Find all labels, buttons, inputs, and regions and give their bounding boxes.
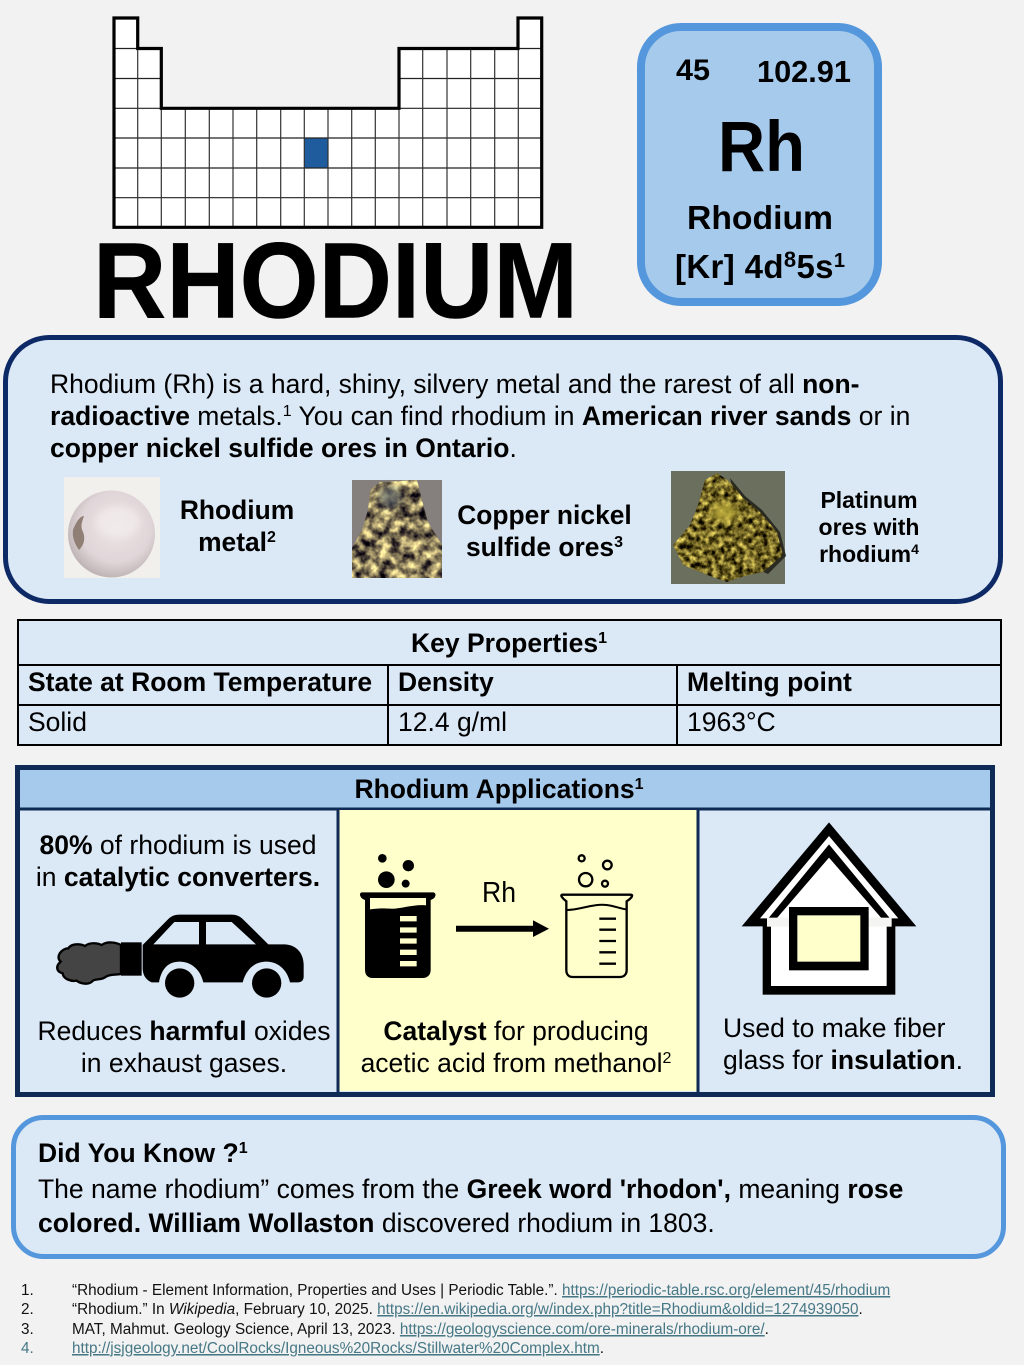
reference 4: http://jsjgeology.net/CoolRocks/Igneous%20Rocks/Stillwater%20Complex.htm. bbox=[72, 1340, 604, 1357]
table title: Key Properties bbox=[411, 628, 598, 658]
atomic number: 45 bbox=[676, 54, 710, 87]
intro text: copper nickel sulfide ores in Ontario. bbox=[50, 433, 517, 463]
intro text: American river sands or in bbox=[582, 401, 910, 431]
atomic mass: 102.91 bbox=[757, 54, 851, 89]
label: platinum ores with rhodium: 4 bbox=[911, 541, 919, 557]
title: RHODIUM bbox=[93, 220, 578, 340]
panel: did you know bbox=[14, 1118, 1004, 1256]
column: melting point: 1963°C bbox=[687, 707, 776, 737]
label: rhodium metal: Rhodium bbox=[180, 495, 294, 525]
reference 3: MAT, Mahmut. Geology Science, April 13, 2023. https://geologyscience.com/ore-minerals/rhodium-ore/. bbox=[72, 1321, 769, 1338]
references bbox=[21, 1282, 890, 1357]
text: reduces harmful oxides bbox=[37, 1016, 331, 1078]
text: insulation: Used to make fiber bbox=[723, 1013, 946, 1043]
intro text bbox=[50, 369, 910, 463]
text: catalyst: Catalyst for producing bbox=[383, 1016, 649, 1046]
reference 4: 4. bbox=[21, 1340, 34, 1357]
column: density: 12.4 g/ml bbox=[398, 707, 507, 737]
periodic table grid bbox=[114, 18, 542, 227]
column: melting point bbox=[687, 667, 852, 737]
did you know text: The name rhodium” comes from the Greek word 'rhodon', meaning rose bbox=[38, 1174, 903, 1204]
symbol: Rh bbox=[718, 108, 805, 187]
label: copper nickel sulfide ores: Copper nickel bbox=[457, 500, 632, 530]
text: catalytic converters: in catalytic converters. bbox=[36, 862, 320, 892]
text: insulation: glass for insulation. bbox=[723, 1045, 963, 1075]
did you know heading: 1 bbox=[239, 1140, 248, 1157]
column: state: State at Room Temperature bbox=[28, 667, 372, 697]
icon: empty beaker bbox=[561, 855, 632, 977]
text: reduces harmful oxides: in exhaust gases. bbox=[81, 1048, 287, 1078]
column: melting point: Melting point bbox=[687, 667, 852, 697]
label: copper nickel sulfide ores bbox=[457, 500, 632, 562]
applications header: Rhodium Applications bbox=[354, 774, 635, 804]
photo: rhodium metal bbox=[64, 477, 160, 578]
intro text: 1 bbox=[283, 403, 292, 420]
label: rhodium metal: metal bbox=[198, 527, 267, 557]
text: catalyst: 2 bbox=[663, 1050, 672, 1067]
column: density bbox=[398, 667, 507, 737]
text: catalytic converters: 80% of rhodium is used bbox=[40, 830, 316, 860]
reference 2: 2. bbox=[21, 1301, 34, 1318]
table title: 1 bbox=[598, 630, 607, 647]
column: state bbox=[28, 667, 372, 737]
element name: Rhodium bbox=[687, 199, 833, 236]
did you know text bbox=[38, 1174, 903, 1238]
label: platinum ores with rhodium: Platinum bbox=[820, 487, 918, 513]
applications header: 1 bbox=[635, 776, 644, 793]
electron configuration: 5s bbox=[796, 248, 834, 285]
panel: applications bbox=[18, 768, 992, 1094]
label: platinum ores with rhodium: ores with bbox=[819, 514, 919, 540]
application: catalytic converters bbox=[36, 830, 331, 1078]
reference 2: “Rhodium.” In Wikipedia, February 10, 2025. https://en.wikipedia.org/w/index.php?title=Rhodium&oldid=1274939050. bbox=[72, 1301, 863, 1318]
reference 1: 1. bbox=[21, 1282, 34, 1299]
reference 3: 3. bbox=[21, 1321, 34, 1338]
text: insulation bbox=[723, 1013, 963, 1075]
label: platinum ores with rhodium: rhodium bbox=[819, 541, 911, 567]
text: catalytic converters bbox=[36, 830, 320, 892]
icon: house bbox=[742, 822, 916, 995]
text: reduces harmful oxides: Reduces harmful oxides bbox=[37, 1016, 331, 1046]
table: key properties bbox=[18, 620, 1001, 745]
label: rhodium metal bbox=[180, 495, 294, 557]
panel: introduction bbox=[6, 338, 1000, 602]
arrow: reaction bbox=[456, 920, 549, 937]
label: platinum ores with rhodium bbox=[819, 487, 919, 567]
electron configuration: 8 bbox=[784, 247, 796, 272]
text: catalyst: acetic acid from methanol bbox=[361, 1048, 663, 1078]
application: catalyst bbox=[338, 809, 698, 1092]
intro text: Rhodium (Rh) is a hard, shiny, silvery metal and the rarest of all non- bbox=[50, 369, 860, 399]
text: catalyst bbox=[361, 1016, 672, 1078]
electron configuration: 1 bbox=[834, 250, 845, 272]
photo: copper nickel sulfide ores bbox=[352, 480, 442, 578]
label: rhodium metal: 2 bbox=[267, 529, 276, 546]
photo: platinum ores bbox=[671, 471, 786, 584]
reference 1: “Rhodium - Element Information, Properties and Uses | Periodic Table.”. https://periodic-table.rsc.org/element/45/rhodium bbox=[72, 1282, 890, 1299]
highlighted cell: rhodium bbox=[304, 138, 328, 168]
label: Rh over arrow: Rh bbox=[482, 877, 516, 909]
column: state: Solid bbox=[28, 707, 87, 737]
intro text: radioactive metals. bbox=[50, 401, 283, 431]
icon: car with exhaust bbox=[57, 915, 304, 998]
electron configuration: [Kr] 4d bbox=[675, 248, 784, 285]
did you know text: colored. William Wollaston discovered rhodium in 1803. bbox=[38, 1208, 715, 1238]
did you know heading: Did You Know ? bbox=[38, 1138, 239, 1168]
label: copper nickel sulfide ores: 3 bbox=[614, 534, 623, 551]
element card bbox=[641, 27, 878, 302]
applications header bbox=[19, 770, 991, 809]
column: density: Density bbox=[398, 667, 494, 697]
application: insulation bbox=[723, 822, 963, 1075]
icon: full beaker bbox=[360, 854, 436, 978]
intro text: You can find rhodium in bbox=[292, 401, 582, 431]
label: copper nickel sulfide ores: sulfide ores bbox=[466, 532, 614, 562]
